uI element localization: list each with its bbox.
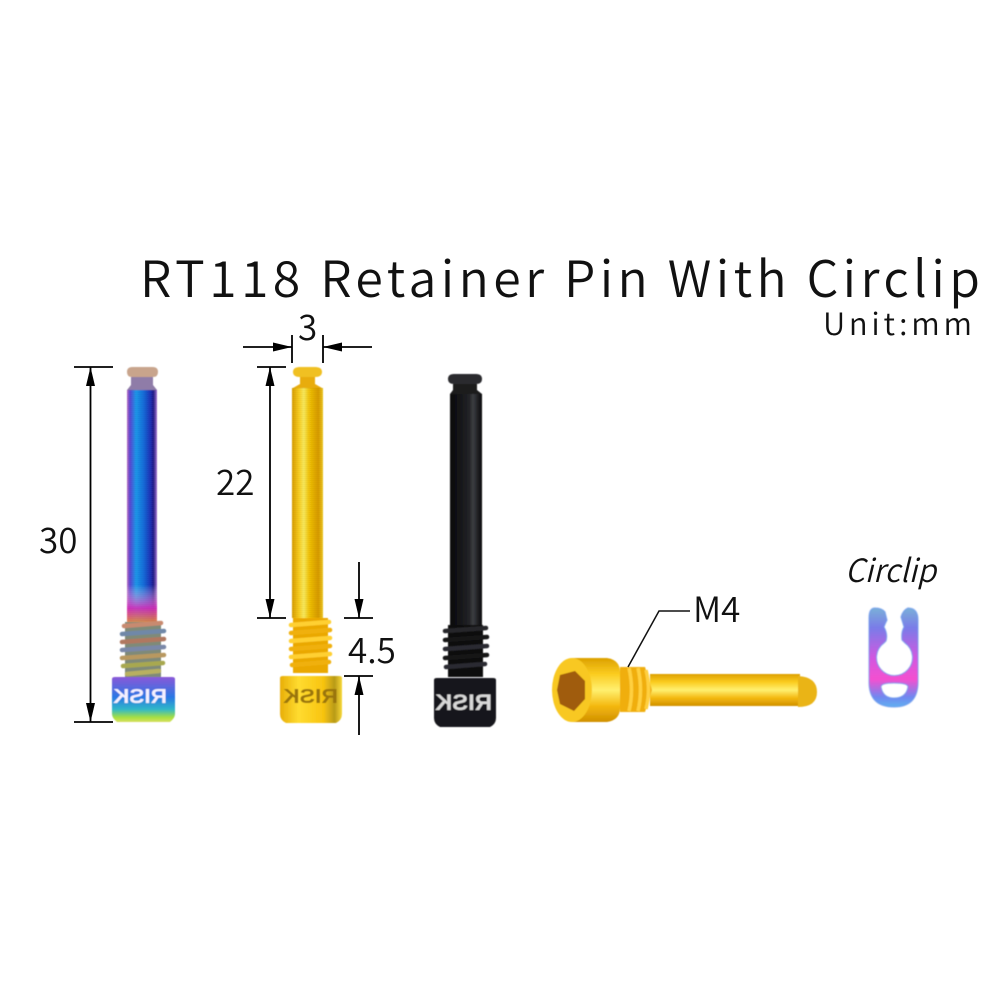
horizontal pin thread bbox=[620, 667, 652, 712]
gold pin shaft bbox=[292, 388, 323, 618]
dimension 30 bbox=[39, 367, 113, 722]
rainbow pin groove bbox=[127, 377, 157, 390]
horizontal gold pin bbox=[552, 658, 817, 722]
label 3: 3 bbox=[298, 300, 317, 351]
label 30: 30 bbox=[39, 513, 77, 564]
label 4.5: 4.5 bbox=[348, 623, 396, 674]
horizontal pin tip bbox=[798, 676, 817, 707]
horizontal pin head bbox=[572, 658, 620, 722]
rainbow pin cap bbox=[127, 367, 158, 377]
rainbow pin shaft bbox=[127, 390, 157, 622]
gold pin head bbox=[280, 676, 342, 723]
M4 leader line bbox=[628, 611, 690, 667]
title: RT118 Retainer Pin With Circlip bbox=[140, 240, 980, 312]
dimension 4.5 bbox=[344, 562, 396, 735]
rainbow pin logo: RISK bbox=[112, 686, 167, 708]
rainbow pin thread core bbox=[125, 622, 161, 677]
M4 label: M4 bbox=[693, 582, 740, 633]
gold pin thread bbox=[291, 618, 330, 673]
horizontal pin shaft bbox=[650, 674, 800, 706]
horizontal pin face bbox=[552, 658, 592, 722]
black pin logo: RISK bbox=[435, 690, 492, 715]
dimension 3 bbox=[243, 300, 372, 363]
rainbow pin bbox=[112, 367, 175, 722]
black pin bbox=[434, 374, 496, 727]
circlip bbox=[869, 608, 918, 707]
gold pin cap bbox=[293, 367, 322, 377]
dimension 22 bbox=[216, 367, 286, 618]
gold pin logo: RISK bbox=[282, 686, 338, 708]
black pin shaft bbox=[450, 394, 482, 625]
rainbow pin thread bbox=[122, 623, 164, 674]
gold pin bbox=[280, 367, 342, 723]
black pin cap bbox=[448, 374, 482, 384]
rainbow pin shaft colour shift bbox=[127, 390, 157, 622]
rainbow pin shaft threading bbox=[127, 390, 157, 622]
circlip label: Circlip bbox=[845, 546, 938, 592]
black pin head bbox=[434, 678, 496, 727]
gold pin shaft threading bbox=[292, 388, 323, 618]
black pin thread bbox=[445, 625, 487, 677]
unit note: Unit:mm bbox=[823, 299, 972, 344]
dimension line 30 bbox=[74, 367, 113, 722]
dimension lines 4.5 bbox=[344, 562, 373, 735]
label 22: 22 bbox=[216, 455, 254, 506]
M4 callout bbox=[628, 582, 740, 667]
rainbow pin head bbox=[112, 677, 175, 722]
hex socket bbox=[557, 671, 585, 711]
black pin groove bbox=[450, 384, 482, 394]
dimension line 22 bbox=[257, 367, 286, 618]
gold pin groove bbox=[293, 377, 322, 388]
dimension lines 3 bbox=[243, 335, 372, 363]
